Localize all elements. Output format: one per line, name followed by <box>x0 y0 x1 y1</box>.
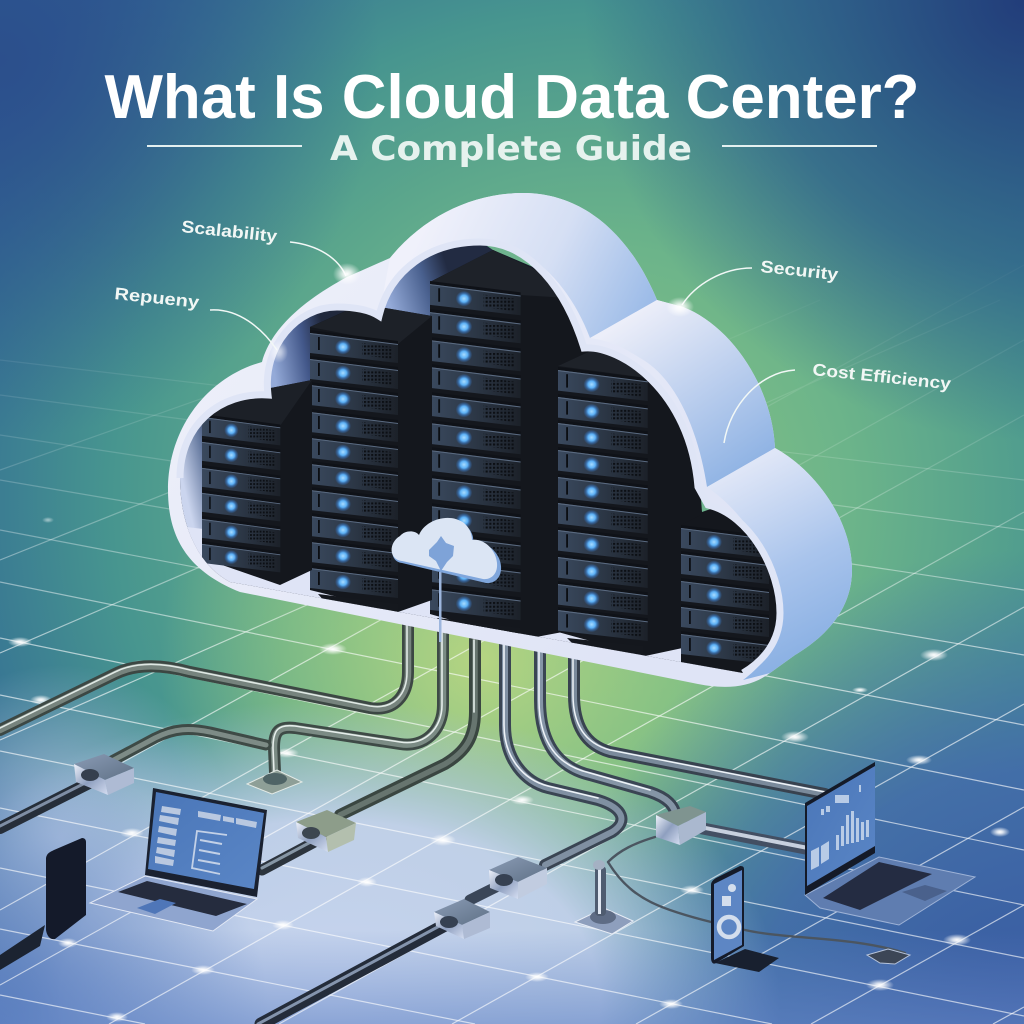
junction box: left <box>74 754 134 795</box>
junction box: right <box>656 806 706 845</box>
pipes <box>0 625 905 1024</box>
callout: scalability: Scalability <box>181 217 279 246</box>
phone: right <box>711 866 779 972</box>
title: What Is Cloud Data Center? <box>104 63 920 132</box>
small cloud icon with stem <box>392 518 501 642</box>
floor post: left <box>247 770 302 794</box>
callout: scalability <box>181 217 361 285</box>
rack 3 <box>430 250 600 640</box>
subtitle with rules: A Complete Guide <box>330 129 692 169</box>
callout: cost efficiency <box>724 360 952 443</box>
callout: cost efficiency: Cost Efficiency <box>812 360 952 394</box>
pipe: junction to right laptop <box>690 825 808 849</box>
floor post: right <box>575 860 633 934</box>
junction box: lower middle <box>434 899 490 939</box>
inner wall: top lobe <box>385 246 492 316</box>
green peek at top <box>486 246 532 267</box>
rack 4 <box>558 348 720 656</box>
pipe: centre run to junction <box>262 640 475 870</box>
cloud cavity with server racks <box>180 246 776 673</box>
chip on cable end <box>867 949 910 964</box>
inner wall: middle lobe <box>270 310 346 388</box>
green peek above rack 5 <box>701 500 710 512</box>
cloud silhouette face <box>168 193 852 687</box>
lobe 5 surface <box>707 448 852 680</box>
rack 5 <box>681 514 776 673</box>
cavity floor <box>188 527 743 673</box>
inner wall: left lobe <box>180 425 202 556</box>
pipe: lower left exit <box>0 778 95 828</box>
laptop: left <box>90 788 267 931</box>
callout: security: Security <box>760 257 840 284</box>
lobe 4 surface <box>590 300 775 487</box>
pipe: left junction to post <box>110 730 266 762</box>
pipe: upper left run <box>0 625 408 730</box>
callout: security <box>666 257 840 317</box>
junction box: upper middle <box>489 857 547 899</box>
perspective floor grid <box>0 265 1024 1024</box>
top lobe surface <box>379 193 657 338</box>
pipe: double bend to lower junctions <box>258 645 621 1024</box>
pipe: to right junction <box>539 650 676 815</box>
rack 2 <box>310 304 432 612</box>
callout: repueny <box>114 284 288 363</box>
cable: thin lower right <box>608 837 905 953</box>
laptop: right <box>805 762 975 925</box>
cloud inner lip <box>180 242 780 673</box>
cloud badge glyph <box>429 536 454 571</box>
callout: repueny: Repueny <box>114 284 201 312</box>
cloud outer shell <box>168 193 852 687</box>
grid glow nodes <box>8 517 1010 1022</box>
junction box: centre <box>296 810 356 852</box>
rack 1 <box>202 380 312 585</box>
pipe: elbow to left floor post <box>273 630 443 772</box>
pipe: to right laptop top <box>573 655 825 794</box>
phone: left <box>0 838 86 970</box>
